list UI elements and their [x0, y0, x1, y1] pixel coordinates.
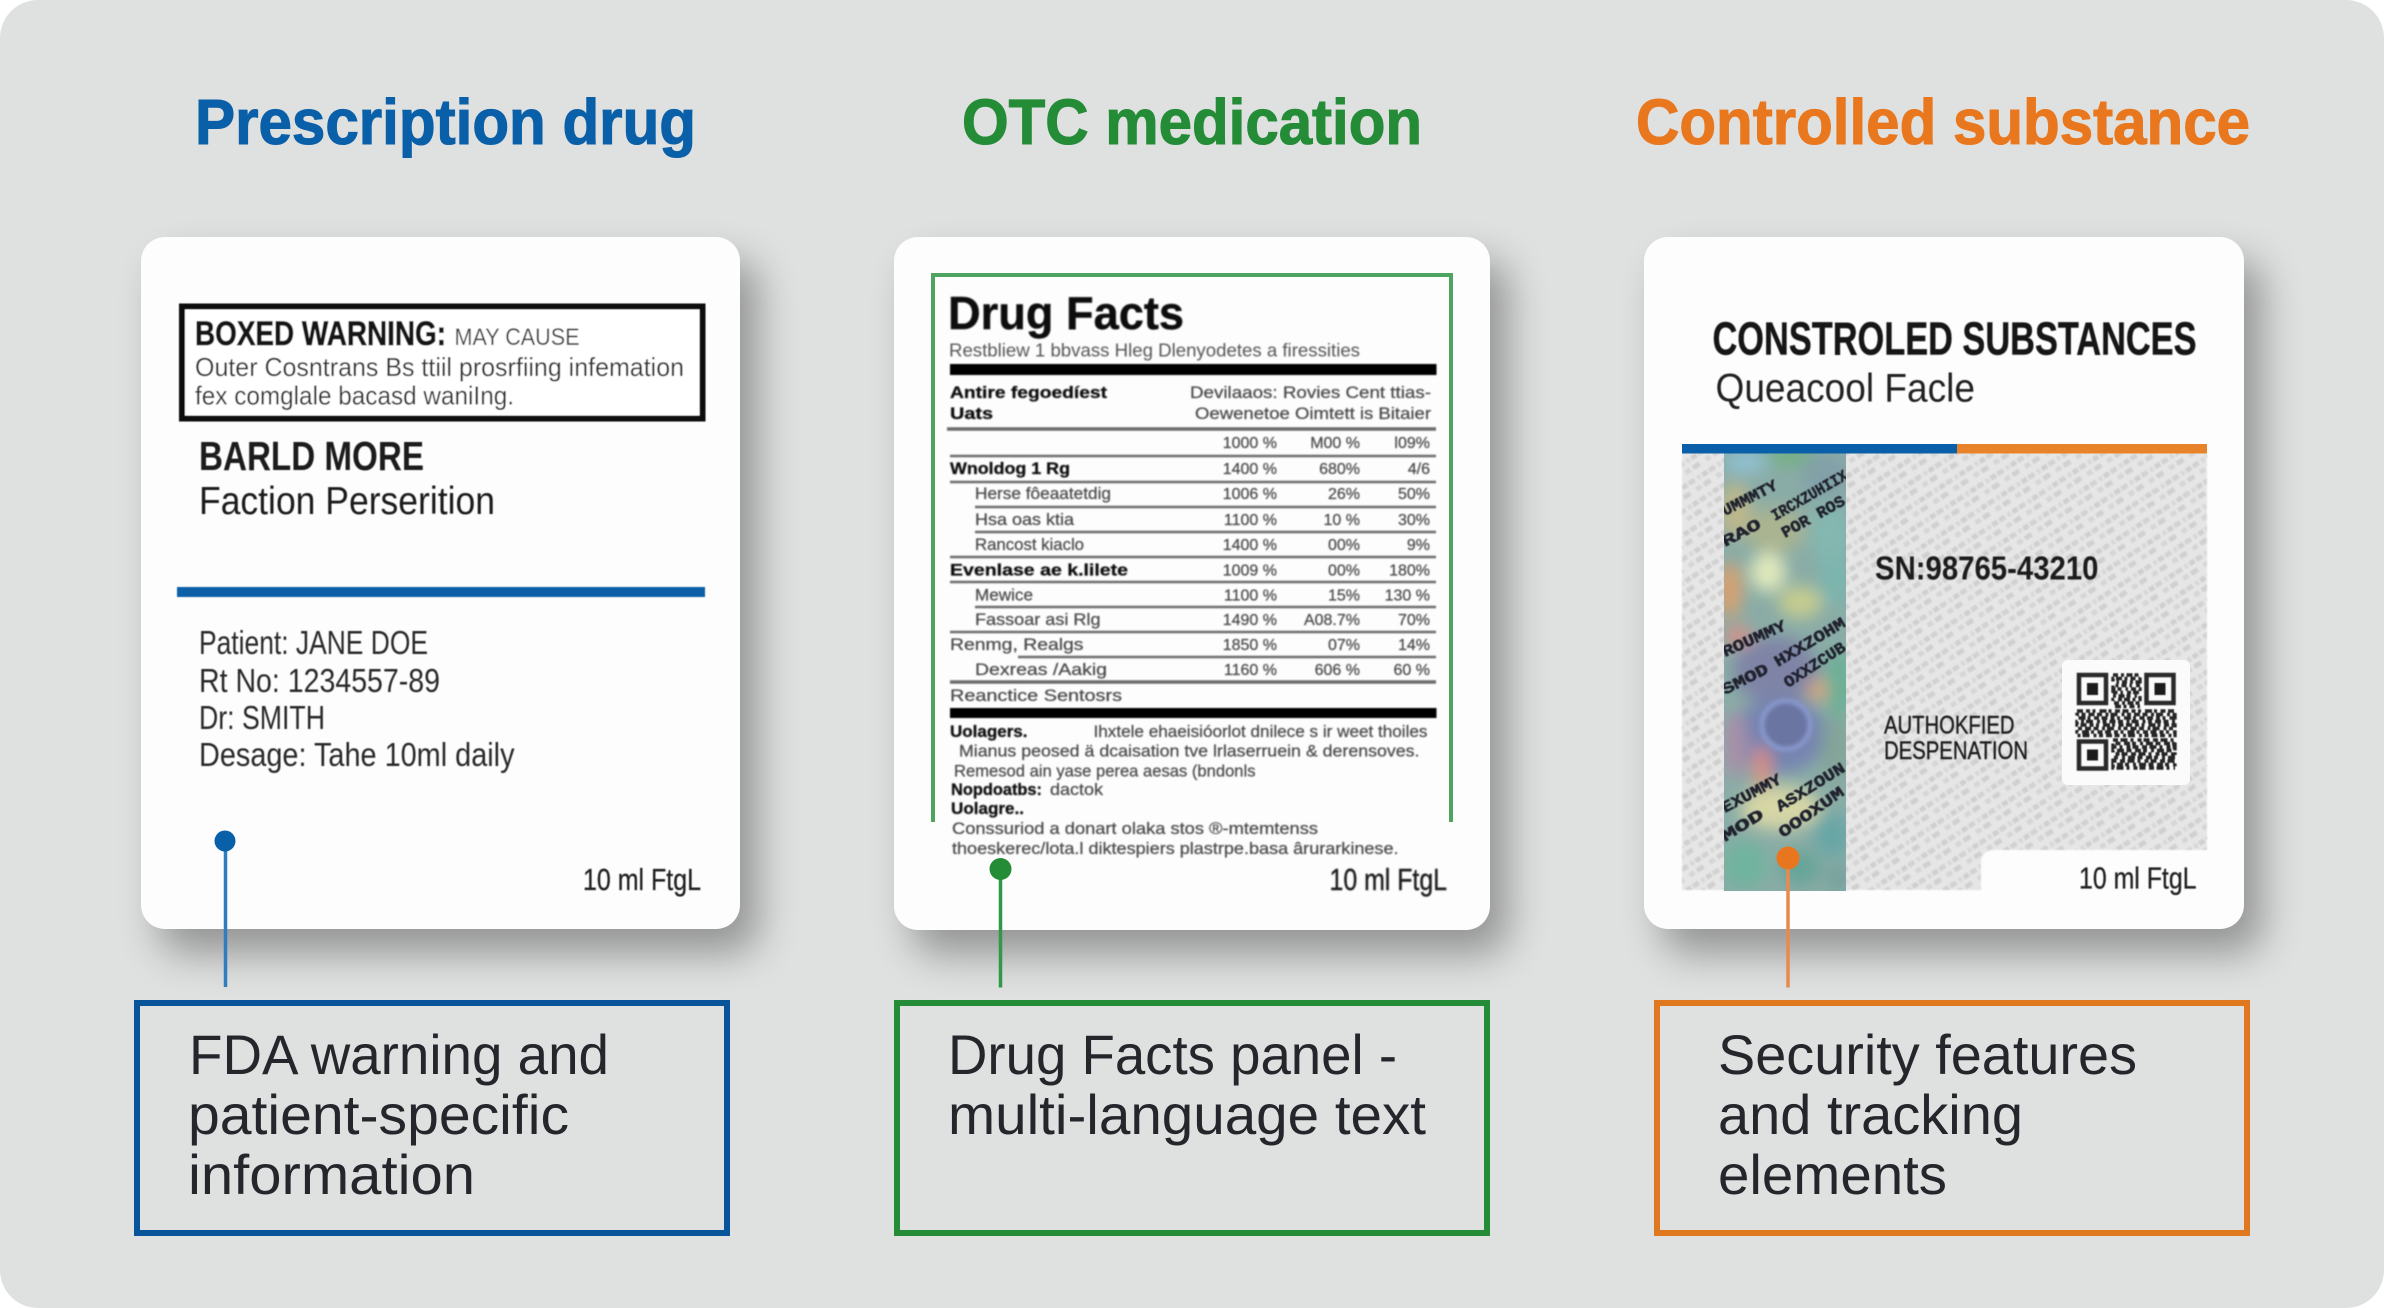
hologram microtext: OOOXUM [1776, 784, 1848, 842]
table rows: A08.7% [1304, 612, 1360, 629]
usage text: Ihxtele ehaeisióorlot dnilece s ir weet thoiles [1094, 722, 1428, 741]
callout: Drug Facts: multi-language text [948, 1083, 1426, 1146]
table rows: Evenlase ae k.lilete [950, 560, 1128, 580]
table rows: 1000 % [1223, 435, 1277, 452]
panel: controlled substance label card [1644, 237, 2244, 929]
usage text: thoeskerec/lota.l diktespiers plastrpe.basa ârurarkinese. [952, 839, 1398, 858]
hologram microtext: RAO [1719, 516, 1765, 551]
drug name: Faction Perserition [199, 480, 495, 523]
patient details: Patient: JANE DOE [199, 624, 428, 661]
hologram microtext: ASXZOUN [1773, 760, 1849, 816]
table rows: 180% [1389, 562, 1430, 580]
table rows: Herse fôeaatetdig [975, 484, 1111, 503]
boxed warning [182, 306, 702, 418]
table header: Antire fegoedíest [950, 383, 1107, 402]
table rows: 60 % [1394, 662, 1430, 679]
callout: Security features: Security features [1718, 1023, 2137, 1086]
table rows [950, 435, 1430, 705]
drug facts heading: Drug Facts [948, 287, 1184, 339]
table rows: Hsa oas ktia [975, 510, 1075, 529]
usage text [950, 722, 1428, 858]
usage text: Conssuriod a donart olaka stos ®-mtemtenss [952, 819, 1318, 838]
callout: FDA warning: information [188, 1143, 475, 1206]
blue and orange divider [1682, 444, 2207, 454]
table rows: 10 % [1324, 512, 1360, 529]
table header: Uats [950, 404, 993, 423]
panel: prescription label card [141, 237, 740, 929]
callout: Security features [1657, 1003, 2247, 1233]
hologram microtext: UMMMTY [1719, 477, 1781, 520]
table rows: 1100 % [1224, 512, 1277, 529]
hologram microtext: OXXZCUB [1781, 639, 1850, 692]
table rows: Mewice [975, 586, 1033, 604]
table rows: 1490 % [1223, 612, 1277, 629]
table header: Devilaaos: Rovies Cent ttias- [1190, 383, 1431, 402]
table rows: 9% [1407, 537, 1430, 554]
connector: orange [1776, 846, 1800, 988]
usage text: dactok [1050, 780, 1104, 799]
usage text: Uolagre.. [951, 799, 1024, 818]
table rows: 26% [1328, 486, 1360, 503]
connector: green [990, 858, 1012, 988]
controlled subheading: Queacool Facle [1716, 366, 1975, 410]
panel: OTC label card [894, 237, 1490, 930]
volume: 10 ml FtgL [1330, 862, 1447, 897]
title: Prescription drug: Prescription drug [195, 86, 696, 158]
table rows: 680% [1319, 461, 1360, 478]
patient details: Rt No: 1234557-89 [199, 662, 440, 699]
table rows: 00% [1328, 562, 1360, 580]
boxed warning: BOXED WARNING: [195, 315, 446, 353]
prescription label content [177, 306, 705, 897]
boxed warning: fex comglale bacasd waniIng. [195, 380, 514, 410]
icon: QR code [2062, 660, 2190, 785]
table rows: 07% [1328, 637, 1360, 654]
table rows: 15% [1328, 588, 1360, 604]
hologram ring [1762, 701, 1810, 749]
security background pattern [1682, 453, 2207, 890]
hologram microtext: POR ROS [1779, 492, 1849, 542]
table rows: 606 % [1315, 662, 1360, 679]
authorized dispensation [1884, 712, 2028, 765]
table rows: Reanctice Sentosrs [950, 686, 1122, 705]
serial number: SN:98765-43210 [1875, 550, 2098, 586]
table rows: 14% [1398, 637, 1430, 654]
lower black bar [950, 708, 1436, 718]
callout: FDA warning: FDA warning and [189, 1023, 609, 1086]
controlled heading: CONSTROLED SUBSTANCES [1712, 312, 2196, 364]
authorized dispensation: AUTHOKFIED [1884, 712, 2014, 740]
callout: Security features: and tracking [1718, 1083, 2023, 1146]
boxed warning: MAY CAUSE [454, 324, 580, 351]
table rows: Dexreas /Aakig [975, 660, 1107, 679]
connector: blue [214, 830, 236, 987]
volume: 10 ml FtgL [2079, 860, 2196, 896]
hologram microtext [1718, 467, 1851, 846]
hologram microtext: ROUMMY [1720, 617, 1790, 662]
subheading: Restbliew 1 bbvass Hleg Dlenyodetes a firessities [949, 340, 1360, 360]
callout: Drug Facts: Drug Facts panel - [948, 1023, 1397, 1086]
usage text: Remesod ain yase perea aesas (bndonls [954, 762, 1256, 780]
patient details [199, 624, 515, 773]
drug name: BARLD MORE [199, 433, 424, 479]
callout: FDA warning [137, 1003, 727, 1233]
hologram microtext: HXXZOHM [1771, 615, 1849, 671]
table rows: Rancost kiaclo [975, 535, 1084, 554]
table rows: Fassoar asi Rlg [975, 610, 1100, 629]
table rows: 1160 % [1224, 662, 1277, 679]
table rows: 30% [1398, 512, 1430, 529]
patient details: Dr: SMITH [199, 699, 325, 736]
table rows: 1400 % [1223, 537, 1277, 554]
table header: Oewenetoe Oimtett is Bitaier [1195, 404, 1431, 423]
patient details: Desage: Tahe 10ml daily [199, 736, 515, 773]
drug name [199, 433, 495, 523]
controlled label text [1712, 312, 2196, 896]
table rows: 1400 % [1223, 461, 1277, 478]
table rows: 1006 % [1223, 486, 1277, 503]
usage text: Nopdoatbs: [951, 780, 1042, 799]
hologram microtext: IRCXZUHIIX [1768, 467, 1851, 525]
table rows: l09% [1394, 435, 1430, 452]
usage text: Mianus peosed ä dcaisation tve lrlaserruein & derensoves. [959, 742, 1420, 760]
top black bar [950, 364, 1436, 375]
table rows: 00% [1328, 537, 1360, 554]
green drug facts frame [933, 275, 1451, 822]
boxed warning: Outer Cosntrans Bs ttiil prosrfiing infemation [195, 352, 684, 382]
blue divider [177, 587, 705, 597]
callout: Security features: elements [1718, 1143, 1947, 1206]
drug facts panel [947, 287, 1447, 897]
table rules [947, 429, 1436, 682]
table rows: Wnoldog 1 Rg [950, 459, 1070, 478]
callout: Drug Facts [897, 1003, 1487, 1233]
authorized dispensation: DESPENATION [1884, 737, 2028, 765]
table rows: M00 % [1310, 435, 1360, 452]
usage text: Uolagers. [950, 722, 1028, 741]
volume: 10 ml FtgL [583, 862, 701, 897]
table rows: Renmg, Realgs [950, 635, 1084, 654]
table rows: 1100 % [1224, 588, 1277, 604]
table rows: 130 % [1385, 588, 1430, 604]
table rows: 1850 % [1223, 637, 1277, 654]
table rows: 4/6 [1408, 461, 1430, 478]
table rows: 50% [1398, 486, 1430, 503]
hologram microtext: SMOD [1719, 661, 1772, 699]
table header [950, 383, 1431, 423]
callout: FDA warning: patient-specific [188, 1083, 569, 1146]
table rows: 1009 % [1223, 562, 1277, 580]
icon: hologram strip [1724, 454, 1846, 891]
title: Controlled substance: Controlled substance [1636, 86, 2250, 158]
title: OTC medication: OTC medication [962, 86, 1422, 158]
table rows: 70% [1398, 612, 1430, 629]
hologram microtext: MOD [1718, 806, 1768, 846]
hologram microtext: EXUMMY [1719, 771, 1785, 817]
